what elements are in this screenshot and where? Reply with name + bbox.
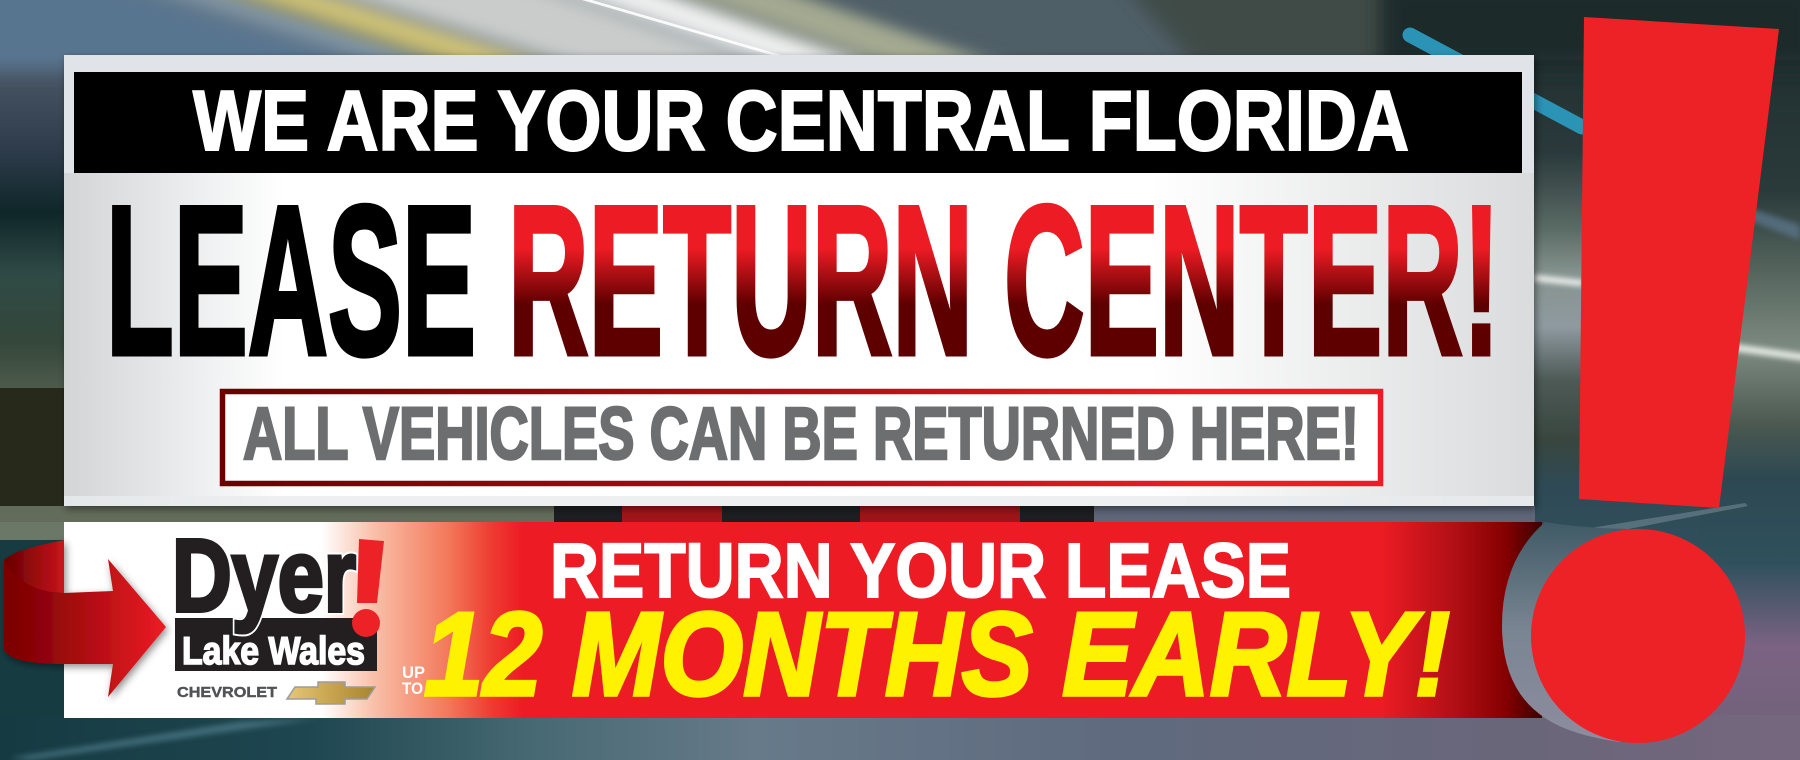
blue streak bbox=[1410, 35, 1582, 127]
banner text: 12 months early: 12 MONTHS EARLY! bbox=[424, 588, 1450, 721]
exclamation shadow ring bbox=[1502, 522, 1660, 742]
banner text: return your lease: RETURN YOUR LEASE bbox=[550, 528, 1291, 614]
header bar: WE ARE YOUR CENTRAL FLORIDA bbox=[193, 74, 1409, 169]
callout box bbox=[222, 392, 1380, 484]
arrow bbox=[4, 540, 166, 697]
callout box: ALL VEHICLES CAN BE RETURNED HERE! bbox=[243, 392, 1359, 475]
heading: lease return center: LEASE bbox=[106, 162, 476, 400]
banner text: up to bbox=[402, 663, 425, 698]
logo location: Lake Wales bbox=[182, 630, 365, 673]
logo wordmark: Dyer bbox=[172, 518, 356, 633]
icon: bowtie bbox=[287, 682, 375, 704]
heading: lease return center bbox=[106, 162, 1500, 400]
banner text: up to: TO bbox=[402, 679, 423, 698]
car remnant between panels bbox=[554, 506, 1094, 522]
logo: Dyer Lake Wales Chevrolet bbox=[172, 518, 384, 704]
main panel bbox=[64, 55, 1534, 506]
exclamation dot bbox=[1531, 529, 1745, 743]
logo wordmark: Dyer bbox=[172, 518, 356, 633]
logo exclamation bbox=[352, 539, 384, 637]
giant exclamation mark bbox=[1502, 17, 1779, 743]
red banner bbox=[64, 522, 1542, 721]
banner text: up to: UP bbox=[402, 663, 425, 682]
exclamation bar bbox=[1579, 17, 1779, 508]
logo box bbox=[175, 618, 377, 671]
logo brand: CHEVROLET bbox=[177, 685, 277, 701]
